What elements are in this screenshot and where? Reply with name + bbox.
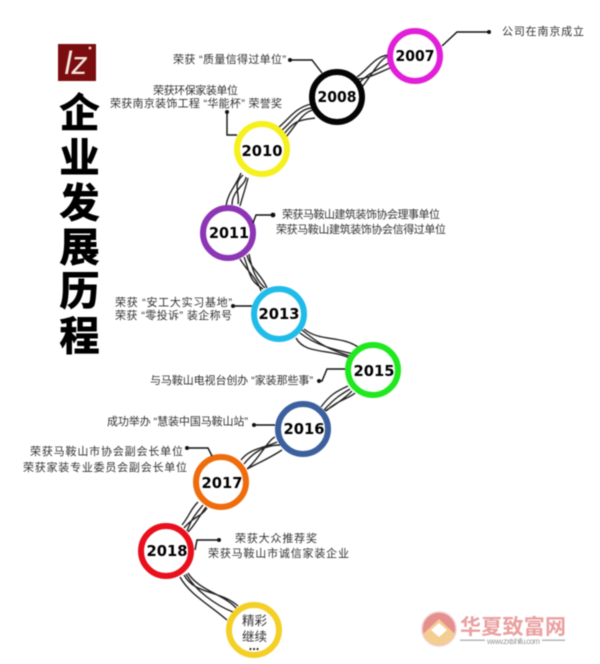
- callout 2017: 荣获马鞍山市协会副会长单位: [30, 444, 183, 458]
- year 2011 node: 2011: [209, 224, 249, 242]
- watermark: brand logo and site name: www.zxtshifu.com: [486, 637, 540, 646]
- braided cables connecting the years: [180, 55, 390, 620]
- year 2013 node: [254, 289, 304, 339]
- title: vertical heading: 程: [60, 315, 100, 359]
- year 2007 node: 2007: [396, 47, 434, 65]
- callout 2011: 荣获马鞍山建筑装饰协会理事单位: [282, 207, 440, 221]
- callout 2017: 荣获家装专业委员会副会长单位: [23, 460, 187, 474]
- year 2016 node: [278, 404, 328, 454]
- year 2008 node: [312, 72, 362, 122]
- callout 2016: 成功举办 “慧装中国马鞍山站”: [107, 414, 248, 428]
- callout 2010: 荣获环保家装单位: [153, 83, 238, 97]
- year 2013 node: 2013: [258, 305, 300, 323]
- closing node: more to come: [229, 605, 279, 655]
- callout 2010: 荣获南京装饰工程 “华能杯” 荣誉奖: [110, 96, 282, 110]
- callout 2017: [23, 444, 212, 474]
- year 2010 node: [237, 124, 287, 174]
- callout 2011: [253, 207, 446, 236]
- callout 2015: 与马鞍山电视台创办 “家装那些事”: [150, 373, 313, 387]
- logo: lz: [64, 45, 88, 81]
- year 2018 node: [141, 526, 191, 576]
- closing node: more to come: ...: [249, 638, 259, 653]
- year 2015 node: [348, 345, 398, 395]
- title: vertical heading: 历: [60, 270, 100, 314]
- callout 2013: 荣获 “安工大实习基地”: [115, 295, 232, 309]
- watermark: brand logo and site name: [422, 612, 566, 646]
- logo: [58, 44, 96, 81]
- title: vertical heading: [60, 92, 100, 359]
- callout 2015: [150, 369, 345, 387]
- closing node: more to come: 精彩: [242, 614, 267, 628]
- callout 2013: [115, 295, 252, 322]
- year 2017 node: 2017: [202, 474, 242, 492]
- title: vertical heading: 企: [60, 92, 100, 136]
- year 2017 node: [196, 457, 246, 507]
- title: vertical heading: 发: [60, 182, 100, 226]
- year 2016 node: 2016: [284, 420, 324, 438]
- year 2008 node: 2008: [318, 88, 356, 106]
- callout 2018: [195, 531, 349, 560]
- year 2015 node: 2015: [354, 362, 394, 380]
- callout 2011: 荣获马鞍山建筑装饰协会信得过单位: [276, 222, 446, 236]
- callout 2008: [173, 52, 322, 73]
- callout 2018: 荣获马鞍山市诚信家装企业: [208, 546, 349, 560]
- title: vertical heading: 展: [60, 226, 100, 270]
- callout 2013: 荣获 “零投诉” 装企称号: [115, 308, 232, 322]
- callout 2007: [442, 24, 584, 46]
- title: vertical heading: 业: [60, 137, 100, 181]
- callout 2008: 荣获 “质量信得过单位”: [173, 52, 286, 66]
- callout 2010: [110, 83, 282, 135]
- watermark: brand logo and site name: 华夏致富网: [460, 615, 566, 639]
- closing node: more to come: 继续: [242, 630, 267, 644]
- year 2010 node: 2010: [242, 142, 282, 160]
- year 2007 node: [390, 31, 440, 81]
- callout 2007: 公司在南京成立: [502, 24, 584, 38]
- year 2011 node: [203, 208, 253, 258]
- callout 2018: 荣获大众推荐奖: [235, 531, 317, 545]
- year 2018 node: 2018: [146, 542, 188, 560]
